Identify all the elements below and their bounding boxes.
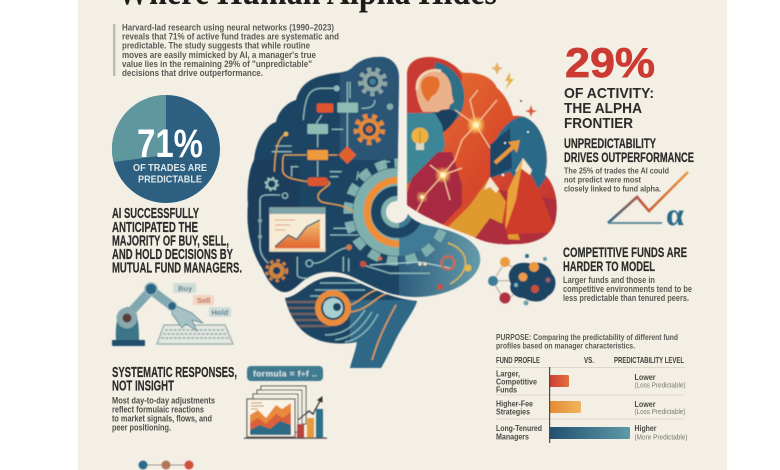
- navy shade: [490, 128, 512, 178]
- crimson lower right: [475, 190, 558, 245]
- AI heading text: [112, 206, 242, 276]
- row: higher-fee strategies: Strategies: [496, 406, 530, 416]
- row: higher-fee strategies: [496, 398, 686, 416]
- 29% heading: FRONTIER: [564, 115, 633, 132]
- row: higher-fee strategies: Lower: [634, 399, 656, 409]
- center hole: [386, 201, 408, 223]
- crimson ribbon: [406, 151, 462, 225]
- competitive funds text block: competitive environments tend to be: [563, 283, 692, 294]
- 71% pie badge: PREDICTABLE: [138, 174, 202, 186]
- neuron branches: [415, 90, 497, 215]
- systematic responses block: to market signals, flows, and: [112, 412, 212, 424]
- purpose note: [496, 332, 678, 350]
- competitive funds text block: less predictable than tenured peers.: [563, 292, 689, 303]
- sparkles: [491, 62, 537, 117]
- AI heading text: AND HOLD DECISIONS BY: [112, 247, 233, 263]
- unpredictability text block: The 25% of trades the AI could: [564, 166, 669, 176]
- 71% pie badge: 71%: [137, 122, 203, 166]
- systematic responses block: [112, 365, 237, 432]
- decision bubbles: [173, 283, 196, 293]
- lightbulb: [412, 128, 428, 144]
- 29% heading: OF ACTIVITY:: [564, 85, 654, 102]
- 29% heading: [564, 39, 655, 132]
- row: larger competitive funds: Competitive: [496, 376, 537, 386]
- row: long-tenured managers: (More Predictable): [634, 432, 688, 442]
- icon: robot arm at keyboard: Sell: [197, 296, 210, 305]
- AI heading text: AI SUCCESSFULLY: [112, 206, 199, 222]
- icon: robot arm at keyboard: Buy: [178, 284, 193, 293]
- upper red band: [406, 56, 462, 114]
- chart window and lower circuits: [258, 200, 430, 281]
- row: larger competitive funds: Funds: [496, 384, 517, 394]
- row: long-tenured managers: Long-Tenured: [496, 423, 542, 433]
- row: larger competitive funds: Lower: [634, 372, 656, 382]
- 71% pie badge: OF TRADES ARE: [133, 162, 207, 174]
- intro text block: moves are easily mimicked by AI, a manager's true: [122, 49, 316, 60]
- table header: PREDICTABILITY LEVEL: [614, 355, 684, 365]
- neuron sparks: [469, 118, 483, 132]
- icon: competitive network: [488, 254, 555, 306]
- AI heading text: MUTUAL FUND MANAGERS.: [112, 260, 242, 276]
- 71% pie badge: [112, 95, 220, 203]
- systematic responses block: NOT INSIGHT: [112, 378, 174, 394]
- brain: left systematic hemisphere: [246, 56, 481, 298]
- row: larger competitive funds: [496, 368, 686, 394]
- purpose note: PURPOSE: Comparing the predictability of different fund: [496, 332, 678, 342]
- growth arrow: [495, 146, 514, 163]
- table header: VS.: [584, 355, 594, 365]
- systematic responses block: peer positioning.: [112, 422, 171, 432]
- row: long-tenured managers: Higher: [634, 423, 657, 433]
- icon: alpha chart: α: [666, 196, 684, 232]
- intro text block: Harvard-lad research using neural networks (1990–2023): [122, 22, 334, 32]
- robot base: [116, 307, 139, 340]
- right lobe circuit: [370, 262, 450, 268]
- unpredictability text block: DRIVES OUTPERFORMANCE: [564, 150, 694, 165]
- comparison table: [496, 332, 688, 443]
- intro text block: decisions that drive outperformance.: [122, 67, 263, 78]
- brain: right creative hemisphere: [406, 56, 558, 246]
- icon: formula pill and charts: formula = f÷f ..: [253, 368, 317, 378]
- unpredictability text block: closely linked to fund alpha.: [564, 184, 661, 194]
- 29% heading: 29%: [565, 39, 655, 86]
- AI heading text: MAJORITY OF BUY, SELL,: [112, 234, 229, 250]
- intro text block: predictable. The study suggests that while routine: [122, 40, 310, 50]
- icon: alpha chart: [608, 172, 688, 232]
- robot arm: [128, 290, 172, 315]
- row: long-tenured managers: Managers: [496, 432, 529, 442]
- brain illustration: [240, 50, 570, 370]
- teal arc behind head: [434, 62, 464, 126]
- icon: bottom nodes: [138, 460, 194, 470]
- icon: formula pill and charts: [244, 366, 327, 439]
- unpredictability text block: [564, 136, 694, 194]
- mountains: [440, 177, 520, 240]
- circuit details: upper left: [260, 69, 393, 217]
- keyboard: [157, 325, 233, 344]
- person silhouette: [416, 70, 454, 112]
- intro text block: [113, 22, 339, 78]
- competitive funds text block: HARDER TO MODEL: [563, 258, 655, 274]
- icon: robot arm at keyboard: Hold: [212, 308, 229, 317]
- competitive funds text block: [563, 244, 692, 303]
- row: higher-fee strategies: (Loss Predictable): [634, 407, 686, 416]
- lower jaw: [284, 276, 418, 369]
- systematic responses block: SYSTEMATIC RESPONSES,: [112, 365, 237, 381]
- row: larger competitive funds: (Loss Predictable): [634, 380, 686, 390]
- row: higher-fee strategies: Higher-Fee: [496, 398, 533, 408]
- AI heading text: ANTICIPATED THE: [112, 220, 198, 236]
- central gear: [352, 167, 400, 257]
- intro text block: value lies in the remaining 29% of "unpredictable": [122, 58, 312, 69]
- systematic responses block: Most day-to-day adjustments: [112, 394, 215, 406]
- competitive funds text block: Larger funds and those in: [563, 274, 655, 285]
- row: long-tenured managers: [496, 423, 688, 442]
- unpredictability text block: UNPREDICTABILITY: [564, 136, 656, 151]
- teal right lobe: [490, 116, 548, 190]
- unpredictability text block: not predict were most: [564, 174, 641, 184]
- table header: FUND PROFILE: [496, 355, 540, 365]
- row: larger competitive funds: Larger,: [496, 368, 520, 378]
- purpose note: profiles based on manager characteristics.: [496, 340, 635, 350]
- icon: robot arm at keyboard: [112, 283, 233, 346]
- 29% heading: THE ALPHA: [564, 100, 642, 117]
- shoulders: [406, 112, 446, 185]
- systematic responses block: reflect formulaic reactions: [112, 404, 204, 414]
- competitive funds text block: COMPETITIVE FUNDS ARE: [563, 244, 687, 260]
- table header: [496, 355, 684, 365]
- intro text block: reveals that 71% of active fund trades are systematic and: [122, 30, 339, 42]
